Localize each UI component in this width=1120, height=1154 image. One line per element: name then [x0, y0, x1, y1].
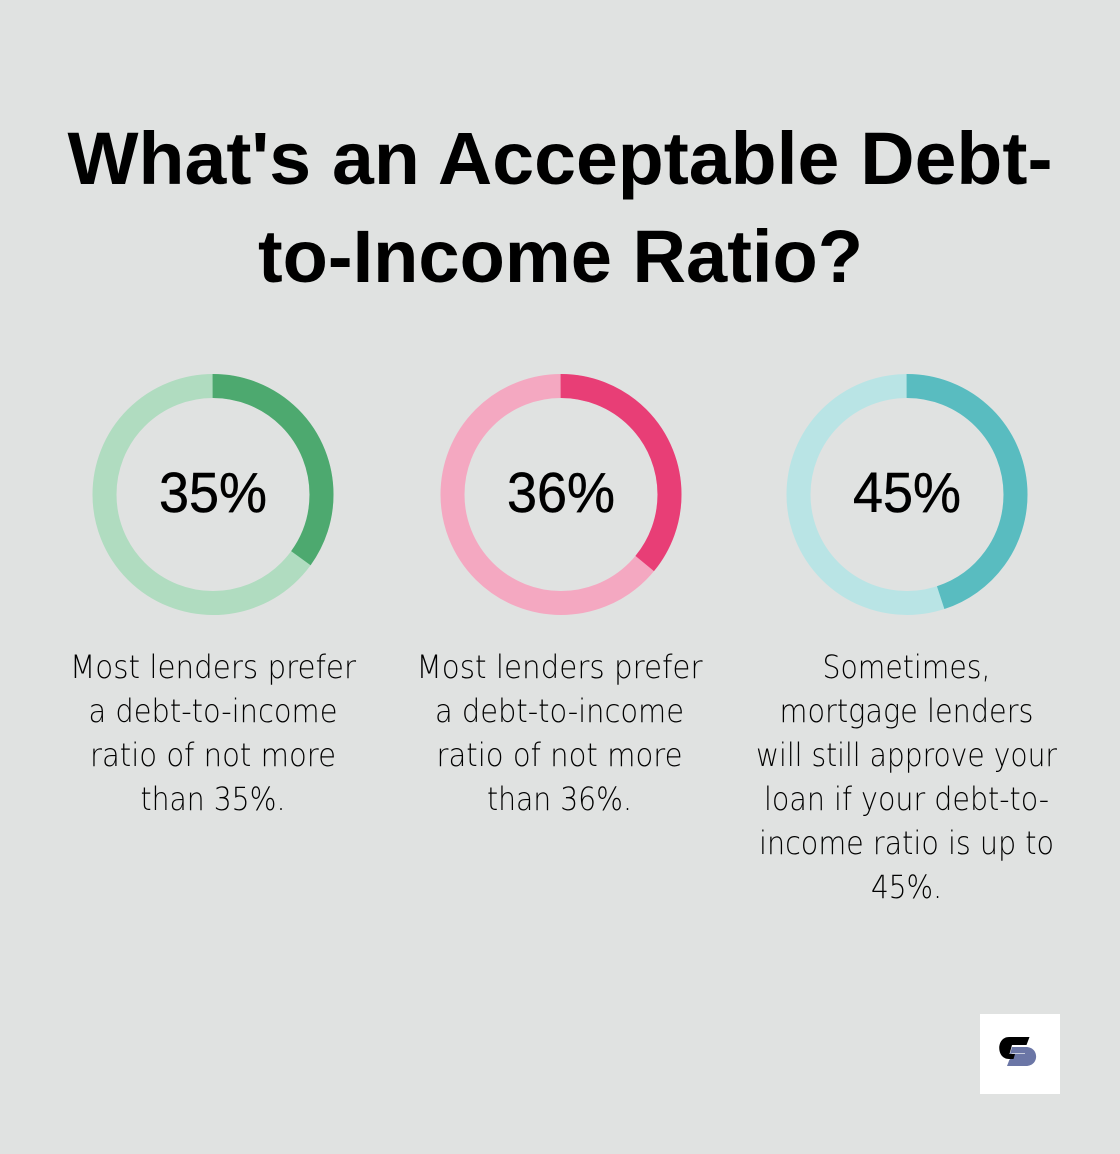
description: 36%: than 36%. — [487, 780, 632, 818]
description: 35%: Most lenders prefer — [70, 648, 357, 686]
logo — [980, 1014, 1060, 1094]
title — [68, 117, 1052, 298]
description: 36% — [416, 648, 703, 818]
description: 45%: loan if your debt-to- — [764, 780, 1049, 818]
title: to-Income Ratio? — [258, 215, 863, 298]
panel: 35% lenders — [70, 386, 357, 818]
donut chart: 45%: 45% — [853, 461, 961, 525]
description: 45%: income ratio is up to — [759, 824, 1054, 862]
description: 36%: a debt-to-income — [435, 692, 684, 730]
donut chart: 36% — [452, 386, 670, 603]
donut chart: 45% — [798, 386, 1016, 603]
panel: 45% lenders — [756, 386, 1058, 906]
description: 45%: mortgage lenders — [780, 692, 1034, 730]
description: 36%: Most lenders prefer — [416, 648, 703, 686]
donut chart: 35%: 35% — [159, 461, 267, 525]
donut chart: 36%: 36% — [507, 461, 615, 525]
description: 45%: will still approve your — [756, 736, 1058, 774]
description: 36%: ratio of not more — [436, 736, 682, 774]
description: 45% — [756, 648, 1058, 906]
description: 35% — [70, 648, 357, 818]
donut chart: 35% — [104, 386, 322, 603]
description: 35%: a debt-to-income — [88, 692, 338, 730]
panel: 36% lenders — [416, 386, 703, 818]
description: 45%: 45%. — [871, 868, 942, 906]
description: 45%: Sometimes, — [822, 648, 990, 686]
description: 35%: ratio of not more — [90, 736, 336, 774]
title: What's an Acceptable Debt- — [68, 117, 1052, 200]
description: 35%: than 35%. — [140, 780, 286, 818]
